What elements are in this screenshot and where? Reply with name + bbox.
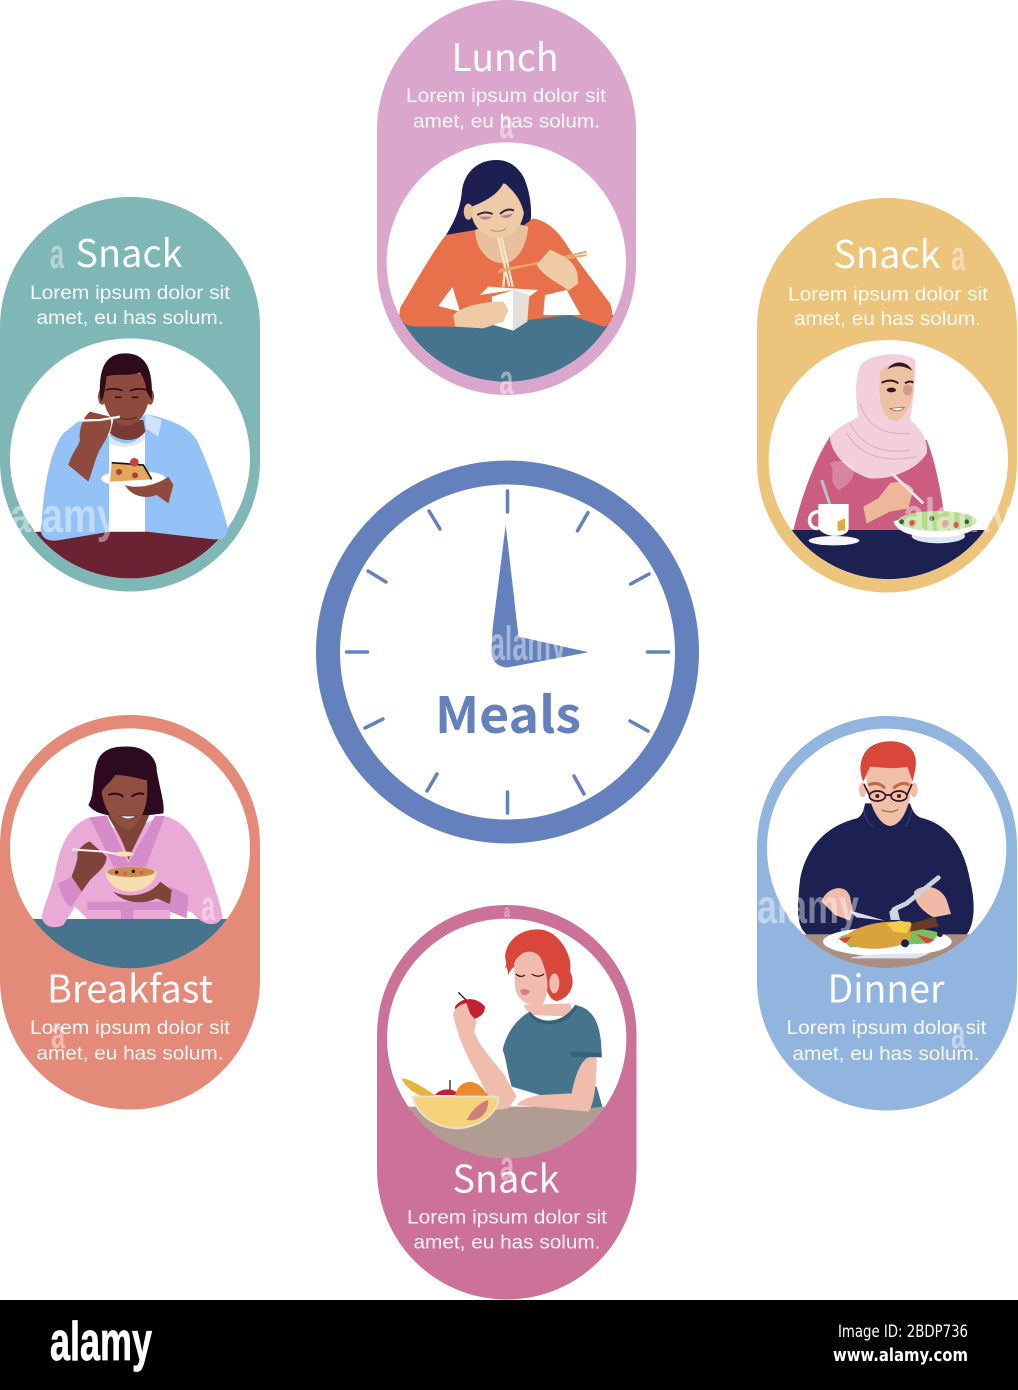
illustration: woman eating fruit — [387, 919, 626, 1158]
text: breakfast description: amet, eu has solum. — [36, 1044, 223, 1064]
footer url: www.alamy.com — [833, 1345, 968, 1366]
watermarks: a — [951, 1012, 966, 1058]
watermarks: alamy — [490, 618, 566, 671]
heading: lunch: Lunch — [452, 27, 558, 82]
watermarks: a — [499, 358, 514, 404]
clock title: Meals — [435, 676, 581, 748]
watermarks: alamy — [757, 881, 859, 934]
heading: snack: Snack — [452, 1148, 560, 1204]
watermarks: a — [500, 1144, 515, 1190]
text: dinner description: amet, eu has solum. — [792, 1044, 980, 1065]
footer logo: alamy — [50, 1310, 152, 1372]
text: dinner description: Lorem ipsum dolor sit — [786, 1018, 987, 1039]
illustration: man eating cake — [10, 338, 250, 578]
watermarks: a — [201, 884, 216, 930]
heading: snack: Snack — [834, 224, 941, 279]
text: snack description: Lorem ipsum dolor sit — [30, 283, 231, 304]
illustration: woman in hijab with salad — [769, 340, 1008, 579]
text: snack description: amet, eu has solum. — [36, 308, 223, 329]
illustration: woman eating cereal — [10, 728, 250, 968]
clock face ring — [328, 472, 687, 832]
panel: dinner — [757, 716, 1017, 1110]
panel: lunch — [377, 0, 636, 395]
watermarks: a — [50, 232, 65, 278]
panel: bottom snack — [377, 905, 636, 1300]
text: lunch description: amet, eu has solum. — [413, 112, 600, 132]
illustration: man eating fish — [767, 729, 1006, 968]
panel: afternoon snack — [757, 198, 1017, 592]
text: snack description: Lorem ipsum dolor sit — [407, 1208, 608, 1228]
watermarks: a — [499, 102, 514, 148]
clock: meals — [328, 472, 687, 832]
heading: snack: Snack — [76, 223, 183, 278]
panel: morning snack — [0, 197, 260, 592]
text: snack description: Lorem ipsum dolor sit — [788, 284, 989, 306]
watermarks: a — [951, 234, 966, 280]
footer bar — [0, 1300, 1018, 1390]
text: snack description: amet, eu has solum. — [414, 1232, 600, 1254]
watermarks — [10, 102, 1013, 1190]
watermarks: a — [51, 1012, 66, 1058]
heading: dinner: Dinner — [828, 958, 945, 1014]
heading: breakfast: Breakfast — [47, 958, 213, 1014]
text: lunch description: Lorem ipsum dolor sit — [406, 86, 607, 107]
footer image id: Image ID: 2BDP736 — [838, 1322, 968, 1342]
clock hands — [491, 525, 588, 668]
illustration: woman eating noodles — [387, 142, 626, 382]
clock tick marks — [346, 491, 668, 813]
watermarks: alamy — [10, 490, 118, 543]
watermarks: a — [504, 902, 511, 922]
text: snack description: amet, eu has solum. — [794, 309, 981, 330]
text: breakfast description: Lorem ipsum dolor sit — [30, 1018, 231, 1039]
panel: breakfast — [0, 715, 260, 1110]
